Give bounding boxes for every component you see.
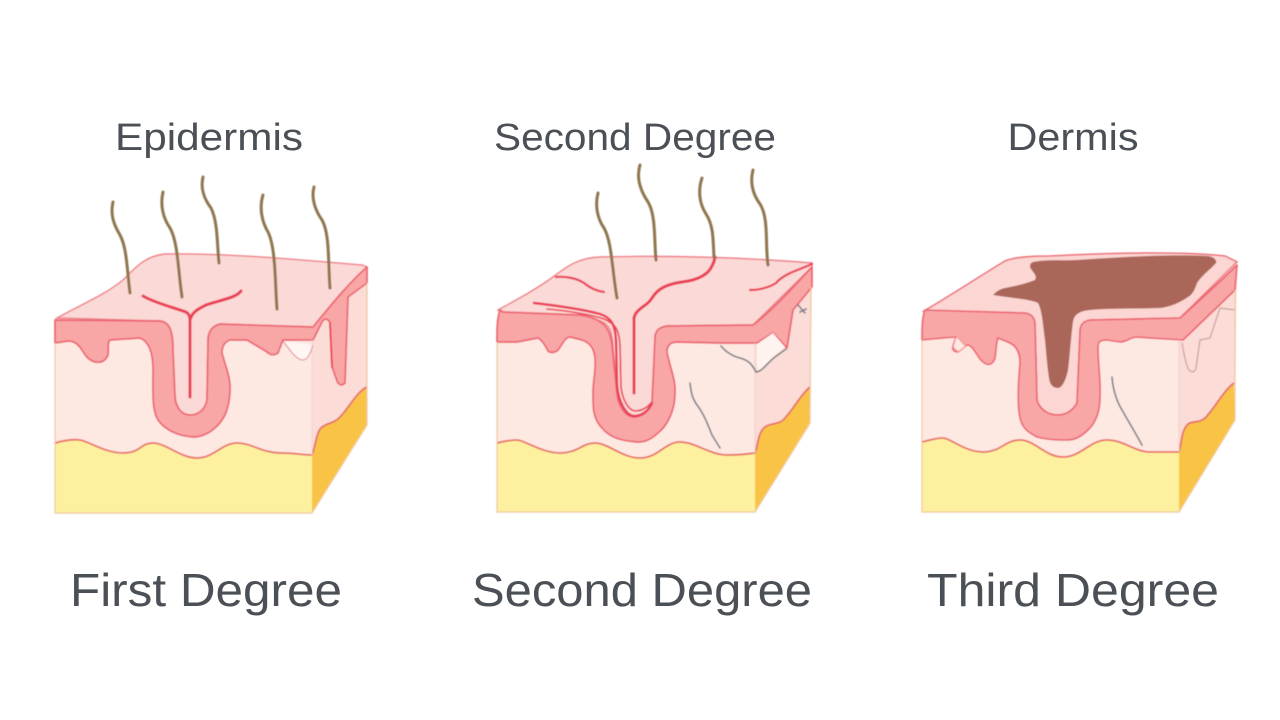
burn lines: [534, 303, 652, 416]
dermis front and side: [55, 267, 367, 513]
small blister: [953, 337, 966, 352]
skin diagram: first degree: [55, 177, 367, 513]
caption: Second Degree: Second Degree: [472, 564, 812, 616]
fat layer side: [312, 387, 367, 513]
top surface: [57, 254, 367, 415]
label: Second Degree top: Second Degree: [494, 117, 776, 159]
fat layer side: [1179, 383, 1235, 512]
block outline: [497, 287, 811, 512]
charred area: [993, 255, 1216, 388]
dermis front and side: [922, 265, 1237, 512]
burn line in side fold: [330, 323, 332, 367]
side blister outline: [1182, 308, 1235, 372]
fat layer front: [55, 440, 312, 513]
burn line in follicle: [143, 291, 241, 397]
epidermis band: [922, 265, 1237, 440]
hairs: [112, 177, 330, 309]
blister: [283, 341, 313, 360]
label: Dermis: Dermis: [1008, 117, 1138, 159]
caption: Third Degree: Third Degree: [927, 564, 1219, 616]
blister patch: [757, 333, 785, 371]
skin diagram: third degree: [922, 253, 1237, 512]
fat boundary line: [55, 387, 367, 458]
skin diagram: second degree: [497, 165, 812, 512]
top surface: [924, 253, 1237, 415]
dermis front and side: [497, 267, 812, 512]
block outline: [922, 290, 1235, 512]
fat boundary line: [497, 387, 810, 458]
top surface: [498, 256, 812, 417]
label: Epidermis: Epidermis: [115, 117, 303, 159]
caption: First Degree: First Degree: [70, 564, 342, 616]
fat layer side: [755, 387, 810, 512]
fat layer front: [497, 440, 755, 512]
fat layer front: [922, 438, 1179, 512]
epidermis band: [55, 267, 367, 437]
tissue cracks: [690, 383, 720, 448]
tissue crack: [1112, 377, 1142, 445]
epidermis band: [497, 267, 812, 442]
hairs: [597, 165, 768, 298]
block outline: [55, 283, 367, 513]
fat boundary line: [922, 383, 1234, 457]
